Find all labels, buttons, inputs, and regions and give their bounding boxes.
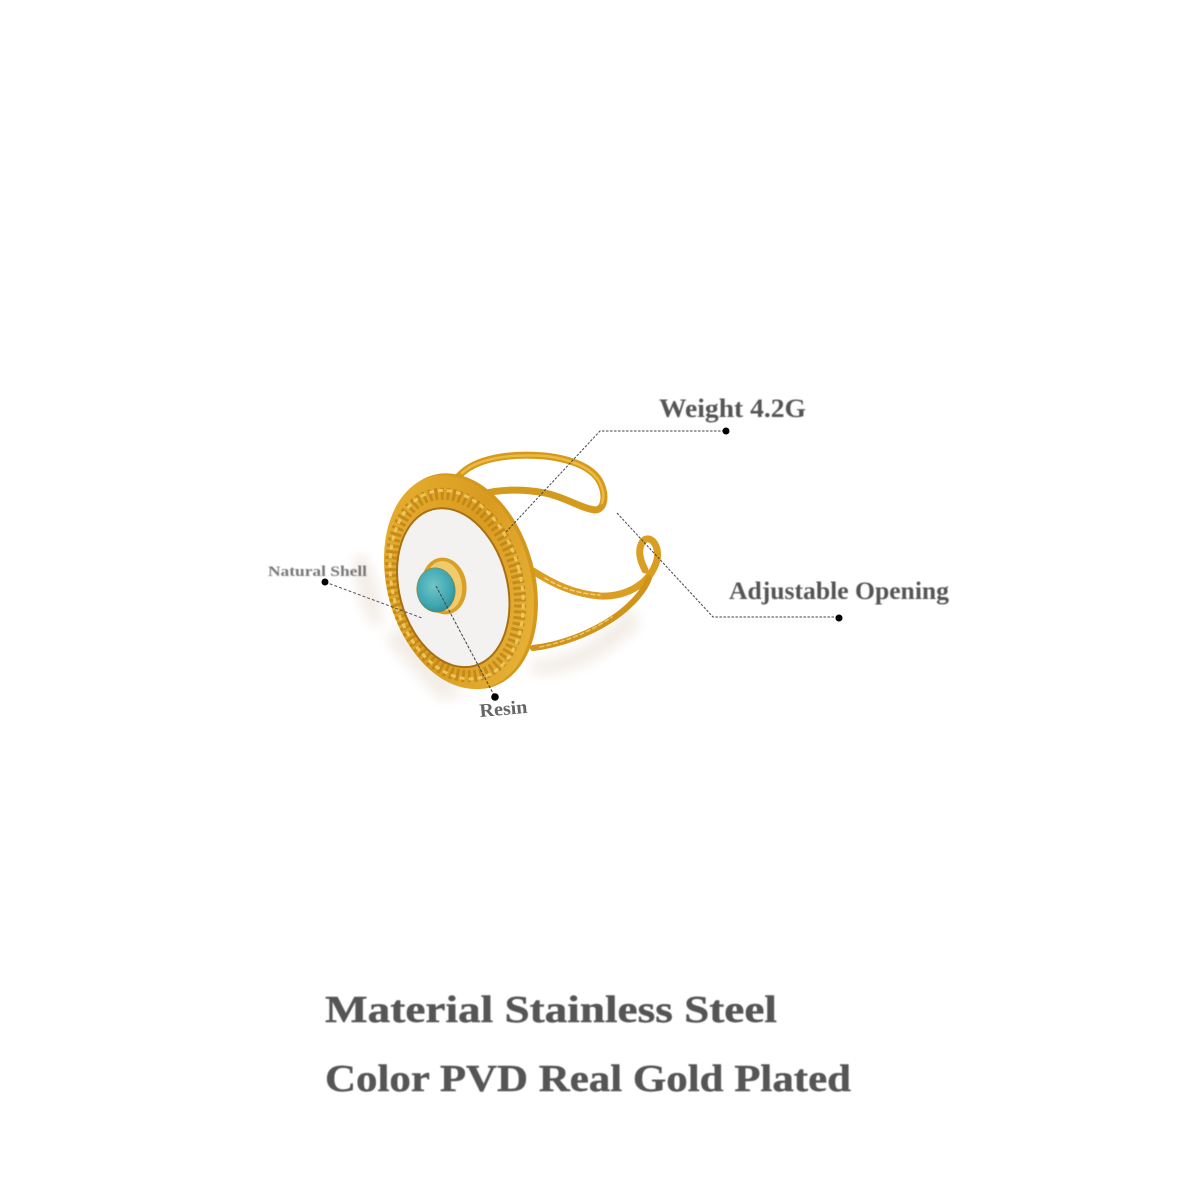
- shell inlay: [381, 497, 525, 679]
- callout: Natural Shell: [268, 564, 422, 618]
- callout: Resin: Resin: [479, 697, 529, 722]
- back band: [459, 455, 658, 648]
- stone bezel: [414, 555, 470, 617]
- soft shadows: [349, 551, 640, 700]
- material line: Material Stainless Steel: [325, 989, 777, 1031]
- callout: Resin: [436, 586, 529, 722]
- callout: Adjustable Opening: Adjustable Opening: [729, 578, 950, 605]
- colour line: Color PVD Real Gold Plated: [325, 1058, 851, 1100]
- disc rim: [361, 456, 561, 707]
- callout: Natural Shell: Natural Shell: [268, 564, 367, 580]
- callout: Weight: [506, 394, 806, 532]
- front lower band: [533, 578, 649, 648]
- ring photo: [349, 455, 658, 707]
- callout: Adjustable Opening: [617, 513, 950, 622]
- front upper band: [533, 539, 658, 596]
- callout: Weight: Weight 4.2G: [659, 394, 806, 423]
